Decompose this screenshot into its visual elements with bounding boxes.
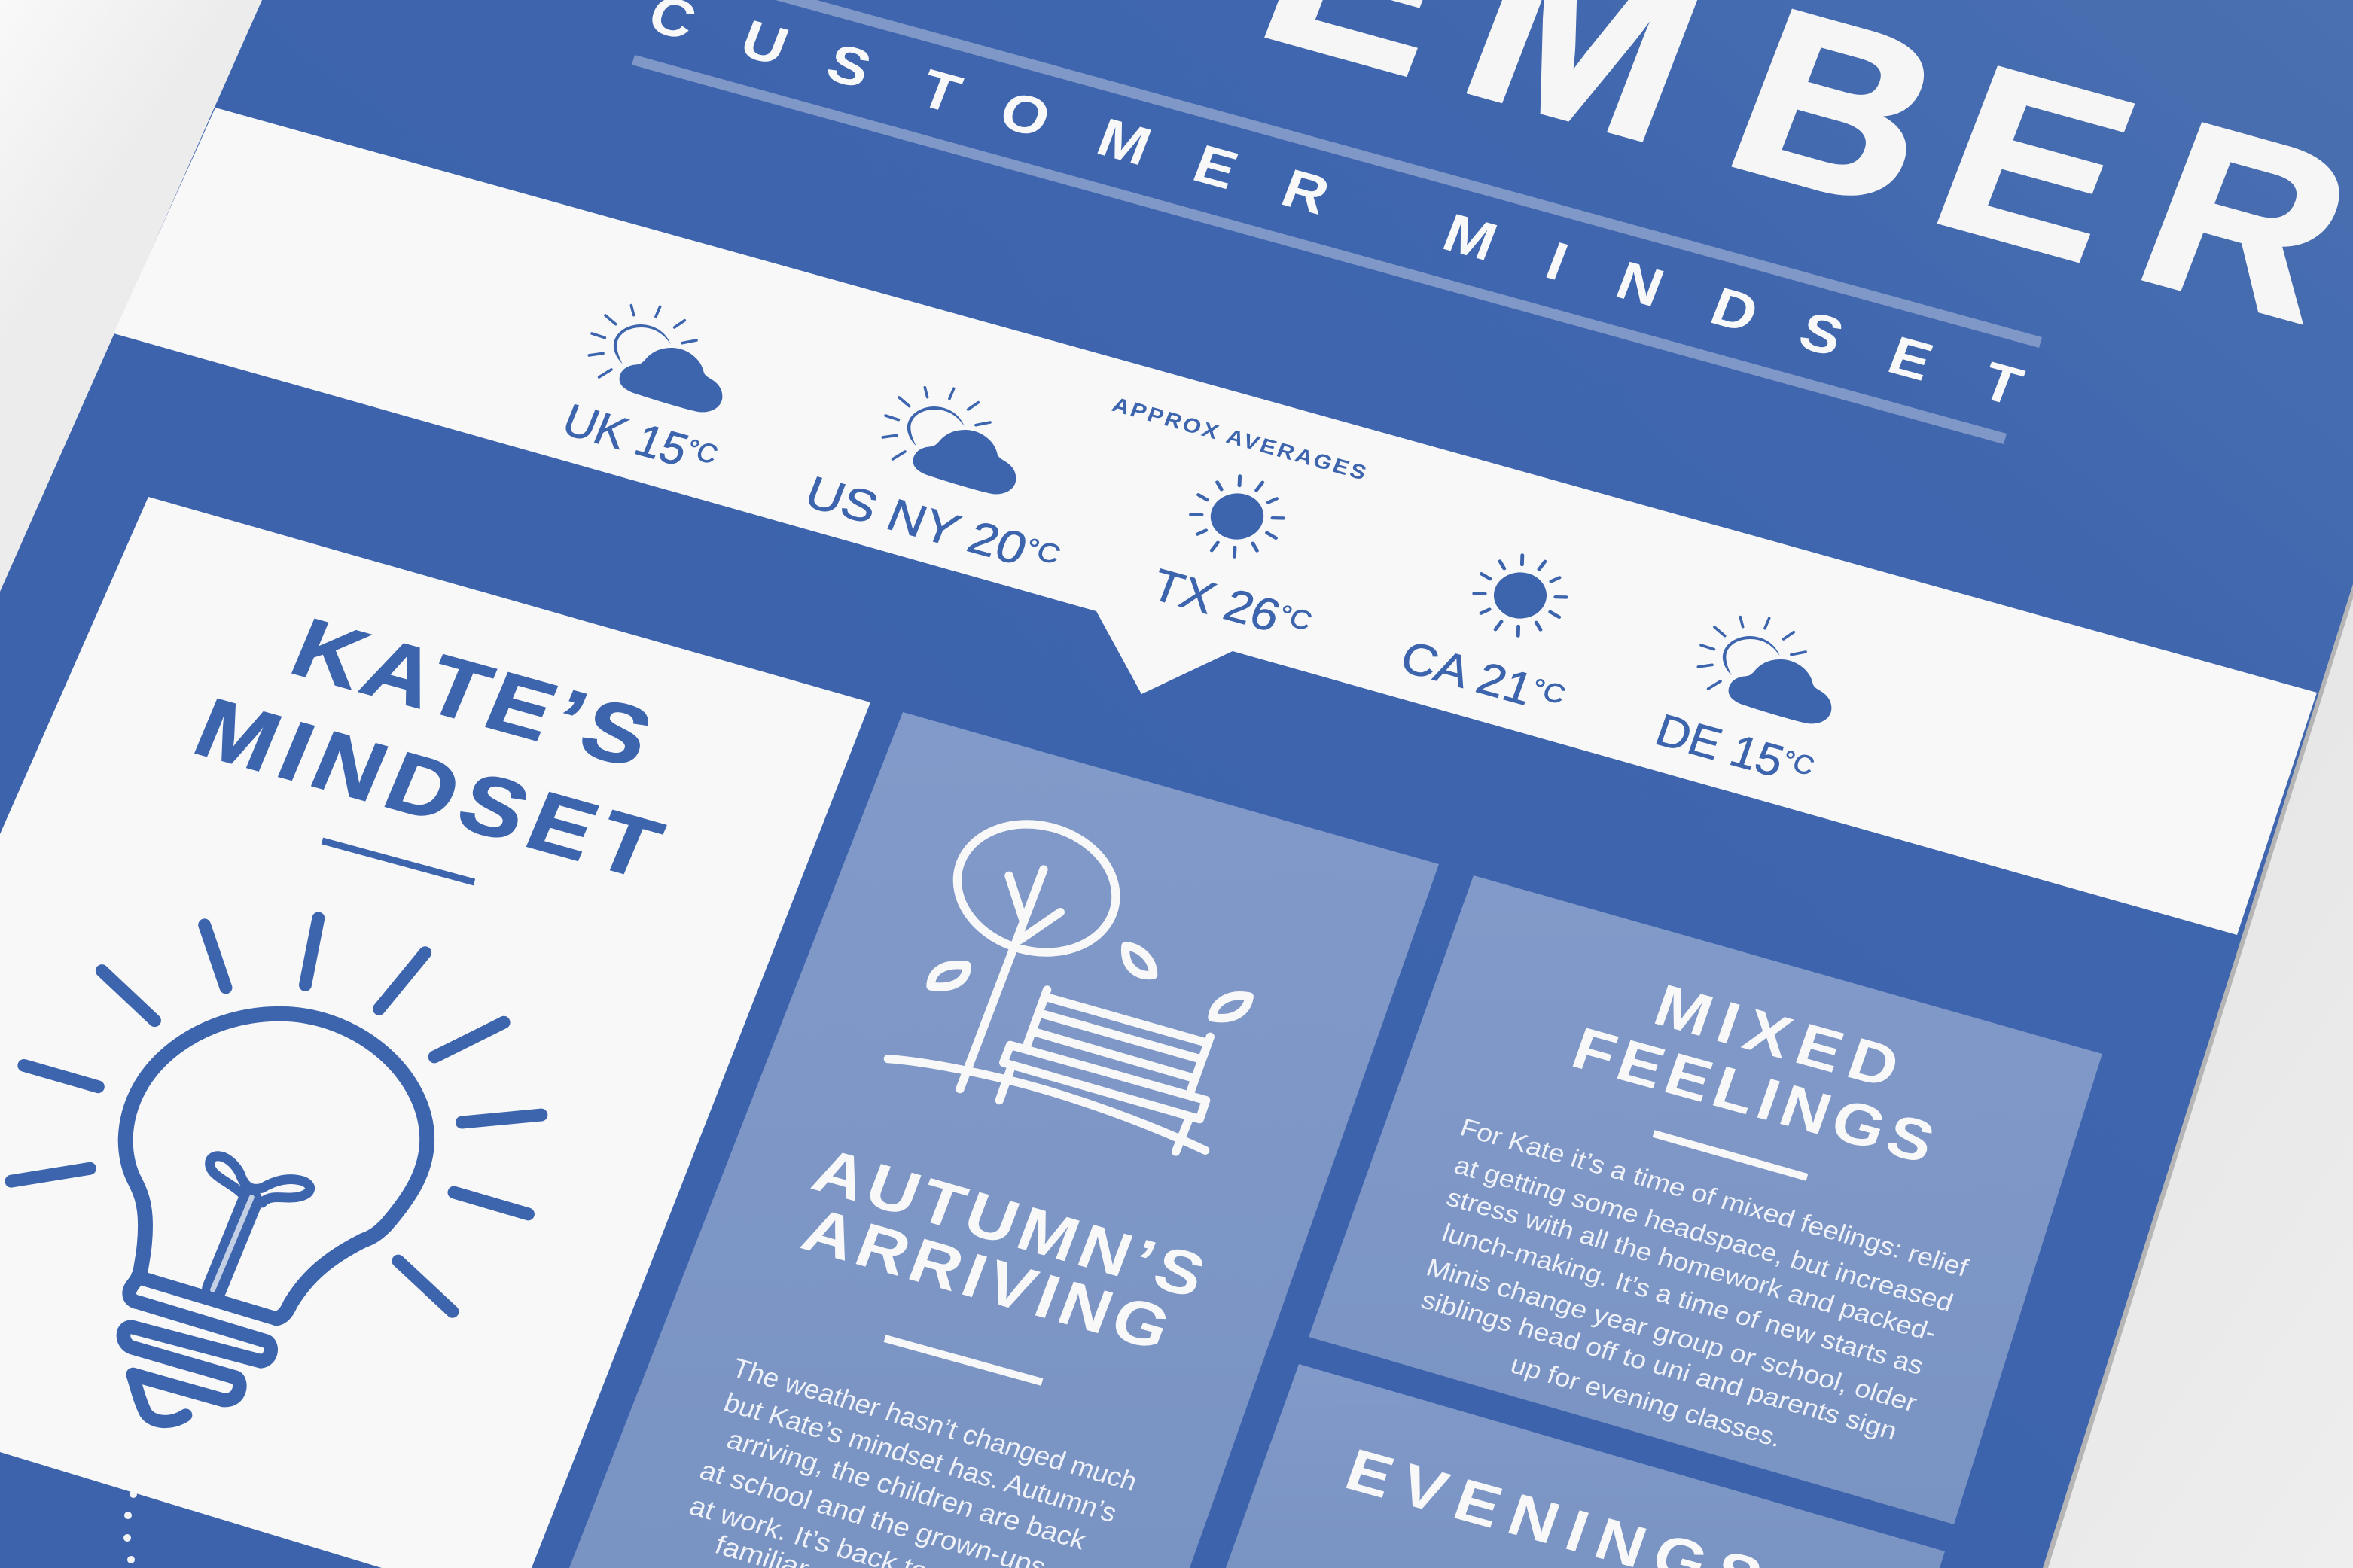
heading: Autumn's: AUTUMN’S (804, 1134, 1215, 1311)
heading: Feelings: FEELINGS (1564, 1014, 1943, 1176)
rule (322, 841, 474, 882)
body text (1418, 1113, 1973, 1453)
heading: Mindset: MINDSET (182, 680, 674, 897)
icon: sun (1465, 547, 1576, 644)
panel: Evenings (1226, 1364, 1945, 1568)
weather: UK (556, 306, 724, 483)
title rules (632, 0, 2042, 444)
heading: Kate's: KATE’S (279, 601, 665, 785)
label: DE temperature: °C (1778, 745, 1818, 781)
note: approx averages: APPROX AVERAGES (1109, 394, 1369, 485)
rule (885, 1338, 1042, 1382)
icon: tree and bench (888, 807, 1249, 1152)
rule (1654, 1134, 1807, 1177)
label: CA temperature: CA 21 (1394, 632, 1544, 716)
body text: up for evening classes. (1507, 1350, 1785, 1453)
icon: light bulb (11, 918, 541, 1421)
body text: Minis change year group or school, older (1423, 1253, 1921, 1417)
weather: DE (1650, 617, 1831, 795)
icon: sun behind cloud (882, 388, 1016, 494)
weather: CA (1394, 547, 1576, 723)
icon: sun behind cloud (1698, 617, 1831, 723)
weather: TX (1144, 467, 1318, 650)
body text: but Kate’s mindset has. Autumn’s (720, 1388, 1120, 1528)
panel: Autumn's arriving (569, 712, 1439, 1568)
label: UK temperature: °C (681, 434, 722, 470)
body text: stress with all the homework and packed- (1443, 1183, 1940, 1347)
dotted connector (123, 1490, 137, 1563)
weather: US NY (798, 388, 1067, 583)
body text: arriving, the children are back (723, 1425, 1091, 1556)
heading: Mixed: MIXED (1646, 971, 1907, 1101)
heading: Arriving: ARRIVING (794, 1194, 1179, 1363)
label: TX temperature: °C (1274, 600, 1316, 637)
panel: weather band (114, 108, 2317, 935)
body text: The weather hasn’t changed much (728, 1353, 1141, 1497)
icon: sun behind cloud (589, 306, 722, 412)
label: DE temperature: DE 15 (1650, 705, 1802, 790)
body text: siblings head off to uni and parents sign (1418, 1286, 1900, 1445)
body text: at getting some headspace, but increased (1451, 1151, 1957, 1317)
body text: lunch-making. It’s a time of new starts as (1439, 1219, 1928, 1380)
panel: Mixed feelings (1309, 875, 2102, 1524)
body text (685, 1353, 1141, 1568)
body text: For Kate it’s a time of mixed feelings: relief (1457, 1113, 1973, 1283)
panel: Kate's mindset (0, 497, 870, 1568)
label: UK temperature: UK 15 (556, 394, 711, 480)
label: US NY temperature: US NY 20 (798, 467, 1033, 574)
label: US NY temperature: °C (1021, 533, 1065, 571)
icon: sun (1181, 467, 1294, 565)
paper edge (2037, 584, 2353, 1568)
label: CA temperature: °C (1528, 674, 1569, 711)
label: TX temperature: TX 26 (1144, 559, 1293, 643)
